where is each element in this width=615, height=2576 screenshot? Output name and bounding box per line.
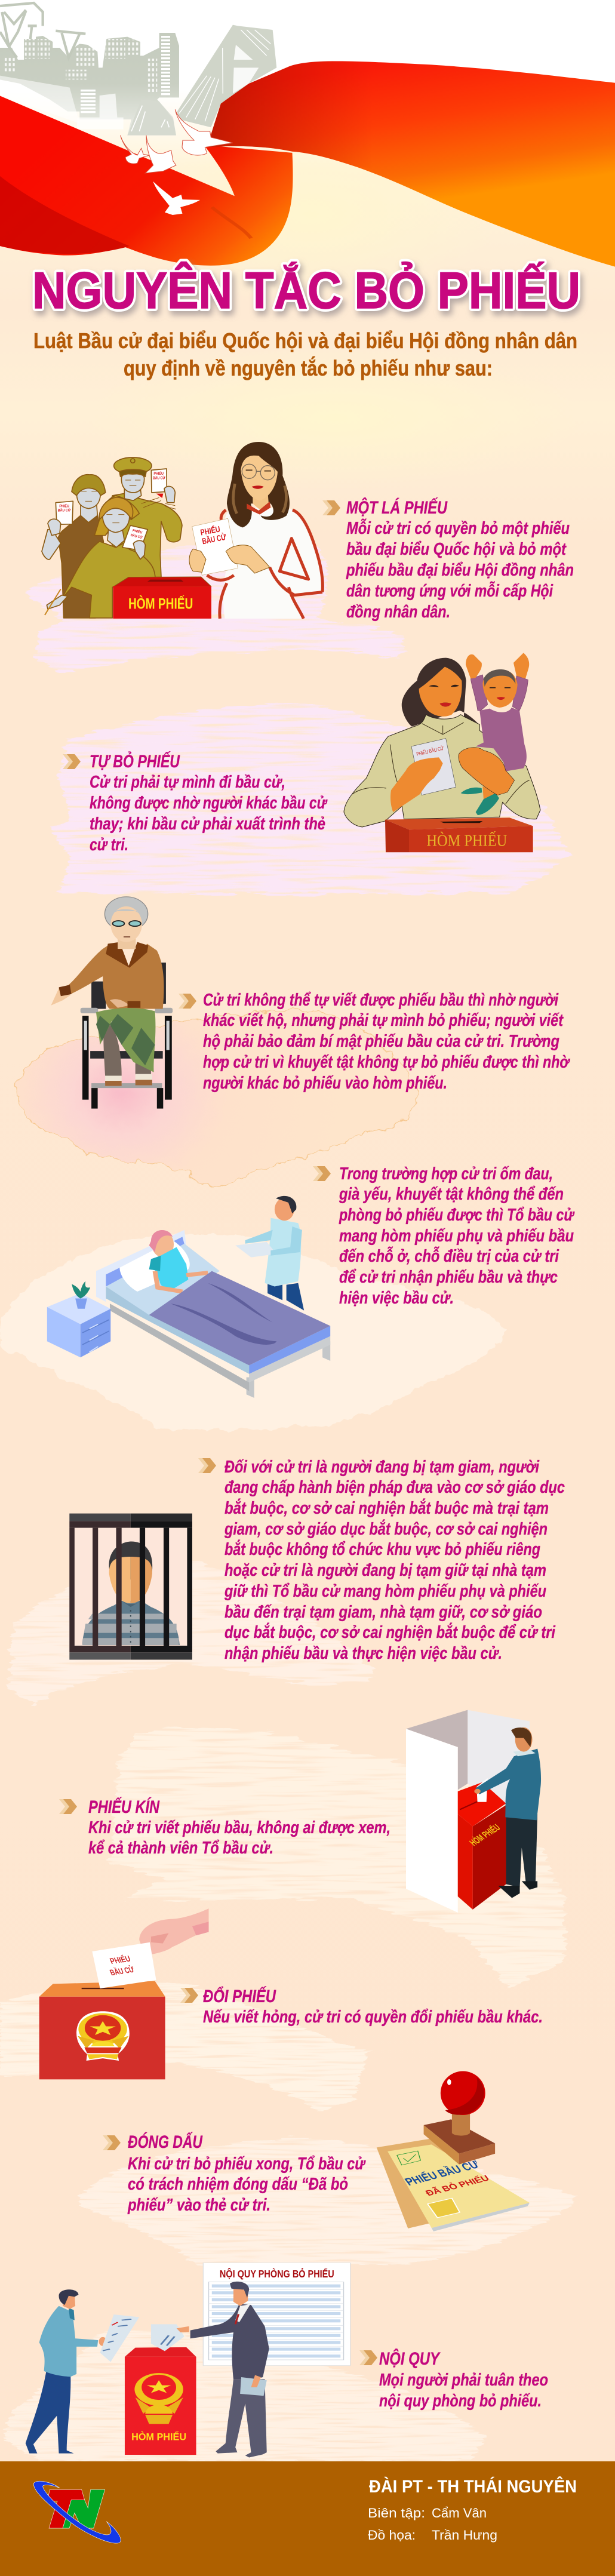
- body text: [339, 1164, 575, 1308]
- arrow icon: [322, 500, 340, 515]
- body text: có trách nhiệm đóng dấu “Đã bỏ: [128, 2175, 348, 2194]
- light blob behind bed: [0, 1233, 506, 1430]
- heading: ĐÓNG DẤU: [128, 2132, 203, 2152]
- brush stroke: pink behind first illustration: [23, 545, 404, 674]
- heading: NỘI QUY: [379, 2348, 441, 2369]
- arrow icon: [179, 994, 196, 1009]
- block: Nội quy: [359, 2348, 548, 2411]
- TN station logo: [33, 2481, 121, 2543]
- body text: nội quy phòng bỏ phiếu.: [379, 2391, 542, 2411]
- block: Tự bỏ phiếu: [63, 751, 328, 854]
- illustration: group of voters with ballot box: [42, 442, 322, 619]
- body text: Nếu viết hỏng, cử tri có quyền đổi phiếu bầu khác.: [203, 2008, 543, 2027]
- ballot labels: BẦU CỬ: [130, 533, 143, 540]
- illustration: hand dropping ballot in box: BẦU CỬ: [108, 1964, 136, 1978]
- illustration: mother with baby and ballot box: [344, 653, 540, 852]
- credits: Cẩm Vân: [432, 2506, 487, 2520]
- body text: hiện việc bầu cử.: [339, 1289, 454, 1308]
- woman in white ao dai: [223, 508, 322, 619]
- illustration: voting booth with man and ballot box: HÒM PHIẾU: [466, 1822, 503, 1848]
- arrow icon: [180, 1988, 198, 2003]
- body text: phiếu” vào thẻ cử tri.: [127, 2196, 270, 2215]
- body text: Khi cử tri viết phiếu bầu, không ai được xem,: [88, 1818, 390, 1837]
- arrow icon: [313, 1166, 331, 1181]
- body text: Trong trường hợp cử tri ốm đau,: [339, 1164, 553, 1184]
- arrow icon: [103, 2135, 121, 2150]
- brush stroke behind rules block: [4, 2331, 487, 2461]
- body text: để cử tri nhận phiếu bầu và thực: [339, 1268, 558, 1287]
- blanket: [149, 1271, 330, 1365]
- ballot labels: PHIẾU: [132, 528, 143, 535]
- heading: TỰ BỎ PHIẾU: [90, 751, 180, 771]
- ballot labels: BẦU CỬ: [58, 509, 70, 513]
- voter on the left: [26, 2289, 139, 2454]
- body text: Mọi người phải tuân theo: [379, 2371, 548, 2390]
- body text: giam, cơ sở giáo dục bắt buộc, cơ sở cai nghiện: [224, 1518, 548, 1539]
- arrow icon: [359, 2350, 377, 2365]
- stamp: [424, 2119, 495, 2154]
- illustration: group of voters with ballot box: BẦU CỬ: [201, 531, 227, 546]
- body text: bầu đến trại tạm giam, nhà tạm giữ, cơ sở giáo: [225, 1603, 542, 1622]
- nightstand: [47, 1293, 110, 1324]
- man: [506, 1814, 537, 1888]
- body text: [203, 991, 570, 1093]
- arrow icon: [63, 754, 81, 769]
- body text: thay; khi bầu cử phải xuất trình thẻ: [90, 814, 325, 834]
- header: lone dove: [153, 182, 200, 215]
- footer band: [0, 2461, 615, 2576]
- ballot labels: PHIẾU: [59, 504, 69, 508]
- body text: Đối với cử tri là người đang bị tạm giam, người: [225, 1458, 540, 1477]
- arrow icon: [59, 1799, 77, 1814]
- body text: [224, 1458, 565, 1663]
- credits: Biên tập:: [368, 2506, 425, 2520]
- ballot box: [458, 1782, 506, 1827]
- arrow icon: [198, 1458, 216, 1473]
- body text: người khác bỏ phiếu vào hòm phiếu.: [203, 1074, 447, 1093]
- body text: [346, 518, 574, 622]
- header: white doves: [121, 109, 233, 173]
- block: Đóng dấu: [103, 2132, 366, 2215]
- body text: bắt buộc không tổ chức khu vực bỏ phiếu riêng: [225, 1539, 540, 1559]
- illustration: rules board, voters and ballot box: [26, 2263, 350, 2457]
- illustration: prisoner behind bars: [69, 1514, 192, 1659]
- body text: dân tương ứng với mỗi cấp Hội: [346, 580, 554, 601]
- illustration: voting booth with man and ballot box: [406, 1710, 541, 1913]
- block: Một lá phiếu: [322, 497, 574, 622]
- woman with scarf: [45, 496, 155, 618]
- ballot box: [113, 577, 211, 587]
- brush stroke behind secret ballot block: [110, 1727, 565, 1988]
- mother dress: [344, 715, 540, 827]
- body text: không được nhờ người khác bầu cử: [90, 794, 328, 813]
- body text: hoặc cử tri là người đang bị tạm giữ tại nhà tạm: [225, 1561, 546, 1580]
- infographic canvas: NỘI QUY PHÒNG BỎ PHIẾU: [220, 2267, 334, 2280]
- block: Phiếu kín: [59, 1797, 390, 1858]
- body text: Cử tri phải tự mình đi bầu cử,: [90, 773, 285, 792]
- national emblem: [76, 2011, 130, 2061]
- illustration: hand dropping ballot in box: [39, 1908, 209, 2079]
- doctor: [235, 1196, 304, 1311]
- illustration: elderly woman in wheelchair: [51, 897, 173, 1109]
- station name: ĐÀI PT - TH THÁI NGUYÊN: [369, 2476, 577, 2497]
- illustration: stamp on voter card: ĐÃ BỎ PHIẾU: [423, 2174, 491, 2197]
- block: detained voters: [198, 1458, 565, 1663]
- body text: Mỗi cử tri có quyền bỏ một phiếu: [346, 518, 570, 538]
- body text: bắt buộc, cơ sở cai nghiện bắt buộc mà trại tạm: [225, 1498, 549, 1518]
- illustration: mother with baby and ballot box: HÒM PHIẾU: [426, 831, 508, 850]
- heading: ĐỔI PHIẾU: [203, 1986, 276, 2006]
- header: city skyline: [0, 3, 276, 136]
- ballot box: HÒM PHIẾU: [131, 2431, 186, 2442]
- body text: đến chỗ ở, chỗ điều trị của cử tri: [339, 1246, 559, 1266]
- body text: giữ thì Tổ bầu cử mang hòm phiếu phụ và phiếu: [224, 1582, 546, 1601]
- credits: Đồ họa:: [368, 2528, 416, 2543]
- body text: Khi cử tri bỏ phiếu xong, Tổ bầu cử: [128, 2154, 366, 2174]
- baby: [461, 653, 529, 815]
- illustration: stamp on voter card: PHIẾU BẦU CỬ: [402, 2158, 482, 2188]
- credits: [368, 2506, 497, 2543]
- officer: [106, 457, 182, 577]
- body text: già yếu, khuyết tật không thể đến: [339, 1185, 564, 1204]
- mother hair: [402, 658, 479, 730]
- bed: [96, 1230, 186, 1302]
- ballot labels: BẦU CỬ: [153, 477, 165, 481]
- body text: bầu đại biểu Quốc hội và bỏ một: [346, 540, 567, 559]
- illustration: group of voters with ballot box: PHIẾU: [199, 524, 221, 537]
- brush stroke behind ballot box: [0, 1982, 369, 2111]
- body text: [90, 773, 328, 854]
- body text: [88, 1818, 390, 1858]
- illustration: stamp on voter card: [377, 2071, 530, 2231]
- body text: [127, 2154, 366, 2215]
- official on the right: [177, 2282, 269, 2457]
- patient: [119, 1240, 190, 1292]
- block: write on behalf: [179, 991, 570, 1093]
- block: Đổi phiếu: [180, 1986, 543, 2027]
- illustration: patient in bed with nurse: [47, 1196, 330, 1398]
- brush stroke behind stamp block: [76, 2137, 577, 2264]
- ballot box: [125, 2324, 196, 2455]
- ballot box: [385, 817, 533, 829]
- credits: Trần Hưng: [432, 2528, 497, 2543]
- subtitle: quy định về nguyên tắc bỏ phiếu như sau:: [124, 355, 493, 380]
- illustration: mother with baby and ballot box: PHIẾU BẦU CỬ: [416, 745, 445, 757]
- body text: kể cả thành viên Tổ bầu cử.: [88, 1839, 273, 1858]
- soldier: [42, 475, 106, 618]
- header: red ribbon flag: [0, 61, 615, 267]
- heading: PHIẾU KÍN: [88, 1797, 160, 1817]
- rules board: [203, 2263, 350, 2366]
- heading: MỘT LÁ PHIẾU: [346, 497, 448, 518]
- subtitle: [33, 328, 577, 380]
- body text: [379, 2371, 548, 2411]
- body text: nhận phiếu bầu và thực hiện việc bầu cử.: [225, 1644, 502, 1663]
- brush stroke behind jail: [8, 1563, 377, 1704]
- block: sick voters: [313, 1164, 575, 1308]
- watercolor blob behind wheelchair: [16, 1010, 420, 1186]
- illustration: group of voters with ballot box: HÒM PHIẾU: [128, 595, 193, 612]
- illustration: hand dropping ballot in box: PHIẾU: [108, 1954, 132, 1966]
- brush stroke: pink behind second block: [51, 704, 569, 893]
- mother face: [419, 667, 462, 717]
- body text: cử tri.: [90, 835, 128, 854]
- ballot labels: [58, 472, 165, 540]
- ballot: [411, 739, 456, 795]
- body text: đồng nhân dân.: [346, 602, 450, 622]
- ballot labels: PHIẾU: [153, 472, 164, 476]
